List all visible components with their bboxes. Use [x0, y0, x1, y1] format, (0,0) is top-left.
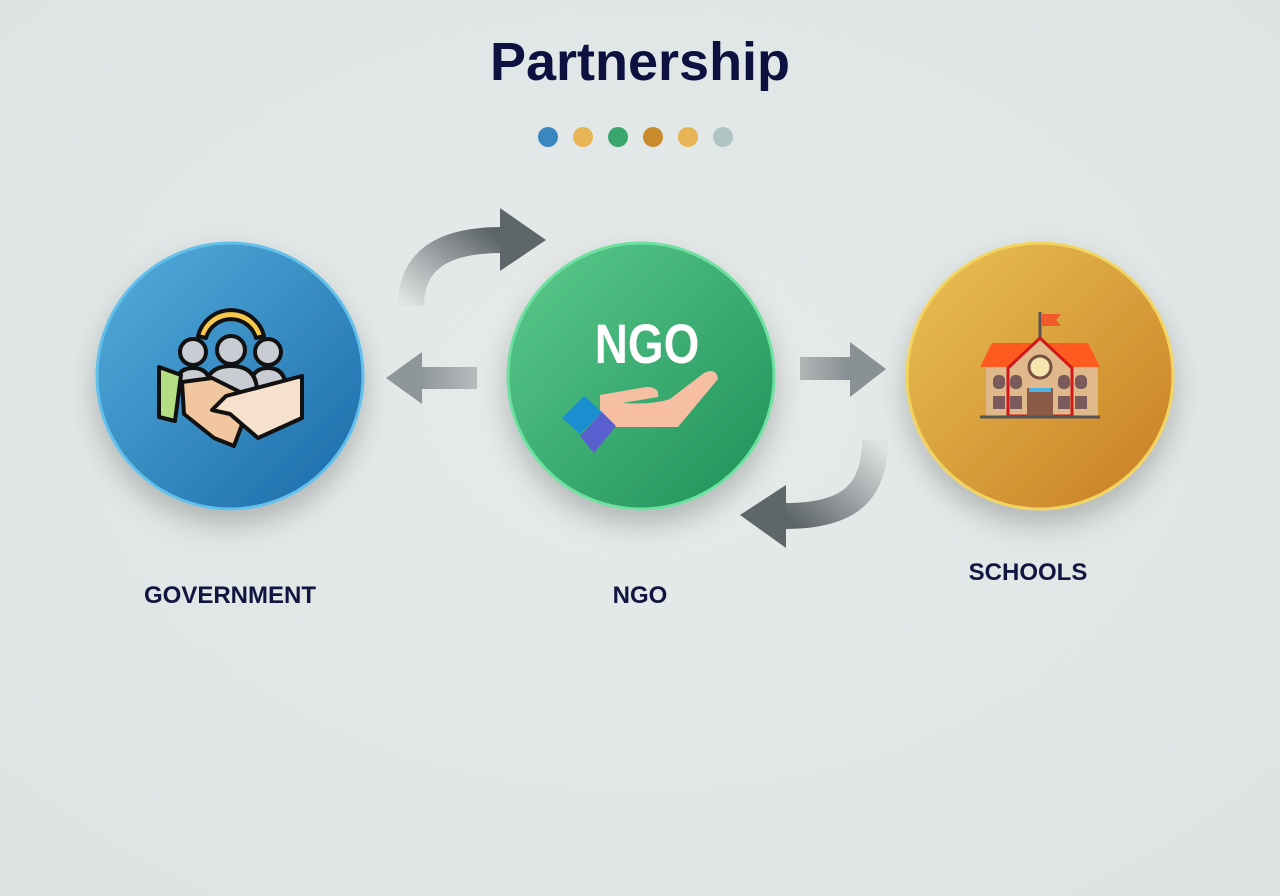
circle: NGO — [508, 243, 774, 509]
circle: schools — [907, 243, 1173, 509]
dots row — [538, 127, 733, 147]
icon: NGO hand — [562, 313, 718, 453]
arrow: left to government — [386, 352, 477, 404]
arrow: curved top to NGO — [411, 208, 546, 306]
arrow: curved bottom to NGO — [740, 440, 875, 548]
label: government: GOVERNMENT — [144, 582, 316, 609]
label: schools: SCHOOLS — [969, 559, 1087, 586]
title: Partnership — [490, 32, 790, 92]
arrow: right to schools — [800, 342, 886, 397]
circle: government — [97, 243, 363, 509]
label: NGO: NGO — [613, 582, 667, 609]
icon: NGO hand: NGO — [595, 313, 699, 375]
icon: handshake team — [159, 310, 302, 446]
icon: school building — [980, 312, 1100, 417]
